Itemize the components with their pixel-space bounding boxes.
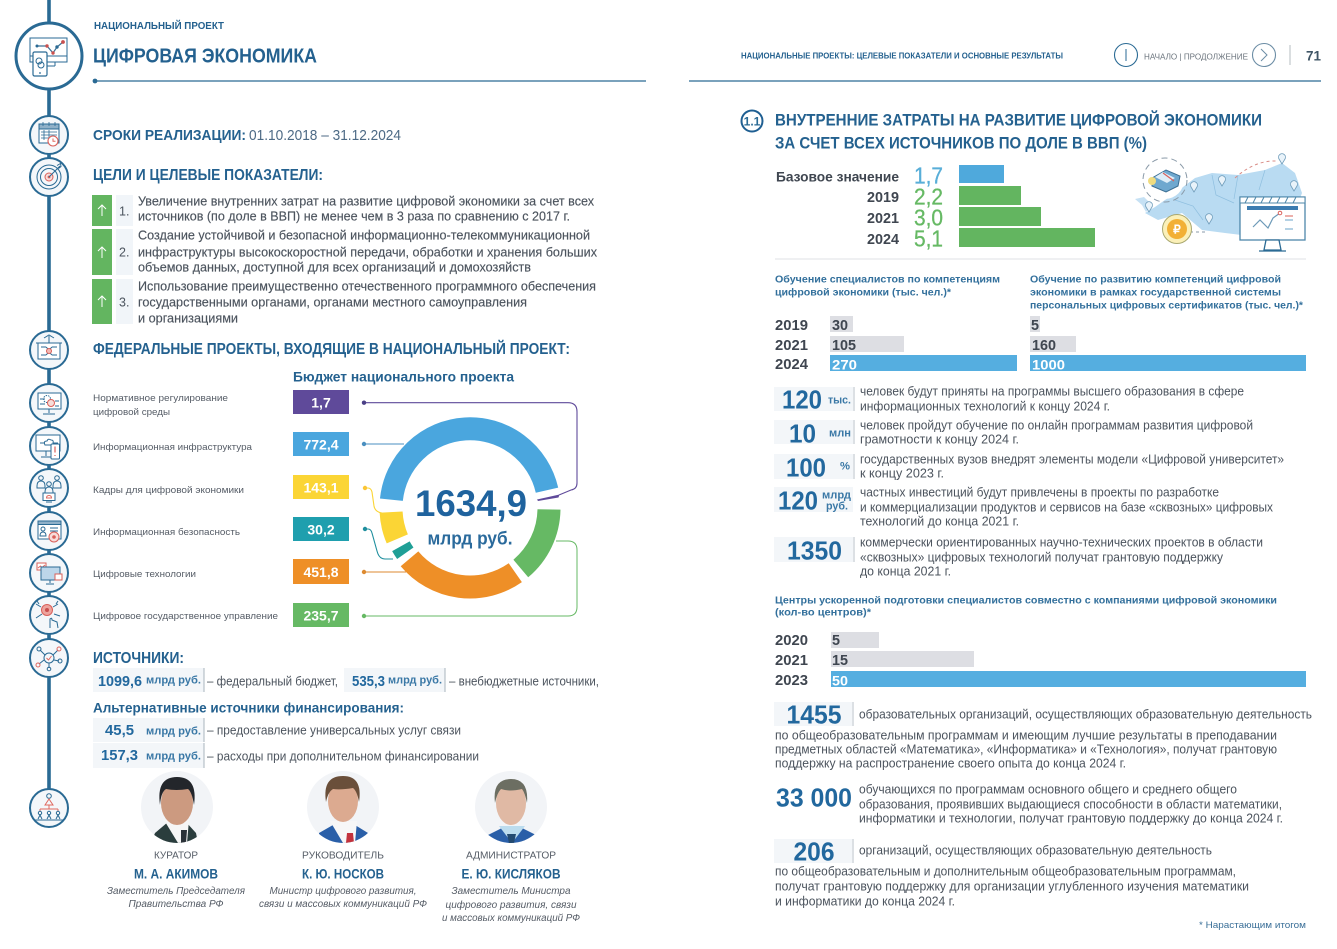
panel: goals list: объемов данных, доступной для всех организаций и домохозяйств bbox=[138, 260, 531, 274]
panel: key figures: человек будут приняты на программы высшего образования в сфере bbox=[860, 384, 1244, 398]
panel: bottom figures: поддержку на распространение своего опыта до конца 2024 г. bbox=[775, 756, 1126, 770]
person: administrator bbox=[442, 850, 580, 924]
panel: key figures: и коммерциализации продуктов и сервисов на базе «сквозных» цифровых bbox=[860, 500, 1274, 514]
panel: key figures: коммерчески ориентированных научно-технических проектов в области bbox=[860, 536, 1263, 550]
panel: goals list: 3. bbox=[119, 296, 129, 310]
bar chart: share of GDP: 2,2 bbox=[914, 184, 943, 210]
panel: key figures: частных инвестиций будут привлечены в проекты по разработке bbox=[860, 486, 1219, 500]
panel: budget value bars: 235,7 bbox=[303, 608, 339, 624]
panel: bottom figures: информатики и технологии, получат грантовую поддержку до конца 2024 г. bbox=[859, 812, 1283, 826]
panel: federal project labels: Цифровые технологии bbox=[93, 569, 196, 580]
panel: bottom figures: по общеобразовательным и дополнительным общеобразовательным программам, bbox=[775, 864, 1236, 878]
person: curator: КУРАТОР bbox=[154, 850, 198, 862]
panel: key figures: грамотности к концу 2024 г. bbox=[860, 432, 1019, 446]
panel: specialists training: 2019 bbox=[775, 317, 808, 334]
panel: bottom figures: 206 bbox=[794, 836, 834, 866]
panel: key figures: к концу 2023 г. bbox=[860, 466, 944, 480]
panel: digital certificates training: 1000 bbox=[1032, 356, 1065, 372]
illustration: map of Russia with monitor and coin bbox=[1135, 154, 1305, 251]
panel: federal project labels bbox=[93, 393, 278, 622]
panel: training centres chart: 50 bbox=[832, 672, 848, 688]
person: head: К. Ю. НОСКОВ bbox=[302, 866, 384, 882]
illustration: map of Russia with monitor and coin: ₽ bbox=[1173, 222, 1181, 236]
panel: specialists training: цифровой экономики (тыс. чел.)* bbox=[775, 286, 952, 298]
panel: goals list: инфраструктуры высокоскоростной передачи, обработки и хранения больших bbox=[138, 246, 598, 260]
person: head: Министр цифрового развития, bbox=[270, 885, 416, 897]
icon: team hierarchy bbox=[30, 789, 68, 827]
panel: sources: млрд руб. bbox=[146, 674, 201, 686]
person: administrator: Заместитель Министра bbox=[452, 886, 571, 897]
panel: sources: Альтернативные источники финансирования: bbox=[93, 700, 404, 716]
panel: federal project labels: Кадры для цифровой экономики bbox=[93, 485, 244, 496]
bar chart: share of GDP bbox=[776, 162, 1095, 252]
person: curator: Правительства РФ bbox=[128, 899, 224, 910]
panel: federal project labels: Цифровое государственное управление bbox=[93, 611, 278, 622]
panel: sources: млрд руб. bbox=[146, 750, 201, 762]
icon: calendar bbox=[30, 116, 68, 154]
panel: sources: ИСТОЧНИКИ: bbox=[93, 650, 184, 667]
donut total value bbox=[415, 483, 527, 548]
panel: sources: – федеральный бюджет, bbox=[207, 674, 338, 688]
panel: sources: – предоставление универсальных услуг связи bbox=[207, 724, 461, 738]
panel: budget value bars: 143,1 bbox=[303, 480, 339, 496]
panel: specialists training: 105 bbox=[832, 337, 856, 354]
panel: sources: 535,3 bbox=[352, 673, 385, 690]
panel: budget value bars: 1,7 bbox=[311, 394, 331, 410]
heading: implementation dates: СРОКИ РЕАЛИЗАЦИИ: bbox=[93, 127, 246, 144]
panel: key figures: млрд bbox=[822, 490, 851, 502]
icon: security card bbox=[30, 512, 68, 550]
panel: key figures: информационных технологий к концу 2024 г. bbox=[860, 400, 1110, 414]
panel: training centres chart: 2020 bbox=[775, 632, 808, 649]
panel: specialists training: 2024 bbox=[775, 356, 809, 373]
panel: training centres chart bbox=[775, 594, 1306, 689]
label: national project: НАЦИОНАЛЬНЫЙ ПРОЕКТ bbox=[94, 19, 224, 32]
panel: key figures: 1350 bbox=[787, 536, 842, 566]
panel: digital certificates training bbox=[1030, 274, 1306, 372]
panel: federal project labels: Нормативное регулирование bbox=[93, 393, 228, 404]
panel: left timeline with icons bbox=[16, 0, 82, 827]
panel: budget value bars: 30,2 bbox=[307, 522, 335, 538]
panel: key figures: 100 bbox=[786, 452, 826, 482]
photo: administrator bbox=[475, 771, 547, 843]
heading: goals: ЦЕЛИ И ЦЕЛЕВЫЕ ПОКАЗАТЕЛИ: bbox=[93, 167, 323, 184]
person: head: связи и массовых коммуникаций РФ bbox=[259, 899, 427, 910]
panel: specialists training: 2021 bbox=[775, 337, 808, 354]
panel: bottom figures: предметных областей «Математика», «Информатика» и «Технология», получат грантовую bbox=[775, 742, 1277, 756]
panel: sources: млрд руб. bbox=[146, 726, 201, 738]
footnote: * Нарастающим итогом bbox=[1199, 920, 1306, 931]
panel: page header left bbox=[93, 19, 646, 83]
panel: goals list: государственными органами, органами местного самоуправления bbox=[138, 296, 527, 310]
icon: presentation board bbox=[30, 331, 68, 369]
panel: key figures: до конца 2021 г. bbox=[860, 564, 951, 578]
bar chart: share of GDP: 2024 bbox=[867, 231, 900, 248]
panel: specialists training: 270 bbox=[832, 356, 857, 372]
icon: target bbox=[30, 158, 68, 196]
panel: key figures: государственных вузов внедрят элементы модели «Цифровой университет» bbox=[860, 452, 1284, 466]
panel: bottom figures: 1455 bbox=[786, 700, 842, 730]
panel: training centres chart: Центры ускоренной подготовки специалистов совместно с компаниями цифровой экономики bbox=[775, 594, 1277, 606]
title: ЦИФРОВАЯ ЭКОНОМИКА bbox=[93, 46, 317, 68]
heading: federal projects: ФЕДЕРАЛЬНЫЕ ПРОЕКТЫ, ВХОДЯЩИЕ В НАЦИОНАЛЬНЫЙ ПРОЕКТ: bbox=[93, 340, 570, 358]
person: administrator: цифрового развития, связи bbox=[446, 899, 577, 911]
panel: key figures: % bbox=[840, 460, 850, 472]
panel: goals list: и организациями bbox=[138, 312, 238, 326]
panel: sources bbox=[93, 650, 599, 768]
panel: training centres chart: (кол-во центров)* bbox=[775, 606, 872, 618]
heading: implementation dates: 01.10.2018 – 31.12.2024 bbox=[249, 127, 401, 144]
person: curator: Заместитель Председателя bbox=[107, 886, 246, 897]
panel: key figures: технологий до конца 2021 г. bbox=[860, 514, 1019, 528]
panel: goals list: 1. bbox=[119, 204, 129, 218]
panel: training centres chart: 2021 bbox=[775, 652, 808, 669]
donut chart bbox=[362, 400, 577, 618]
bar chart: share of GDP: 2019 bbox=[867, 189, 899, 206]
panel: key figures: 10 bbox=[789, 418, 816, 448]
panel: sources: – расходы при дополнительном финансировании bbox=[207, 750, 479, 764]
panel: training centres chart: 5 bbox=[832, 632, 840, 649]
donut total value: млрд руб. bbox=[428, 528, 512, 548]
panel: budget value bars: 451,8 bbox=[303, 564, 339, 580]
panel: key figures: 120 bbox=[778, 486, 818, 516]
panel: training centres chart: 15 bbox=[832, 652, 848, 669]
icon: people bbox=[30, 469, 68, 507]
panel: key figures: 120 bbox=[782, 384, 822, 414]
panel: key figures: млн bbox=[829, 428, 851, 440]
panel: goals list: Использование преимущественно отечественного программного обеспечения bbox=[138, 280, 596, 294]
person: administrator: АДМИНИСТРАТОР bbox=[466, 850, 556, 862]
person: head bbox=[259, 850, 427, 910]
panel: budget value bars bbox=[293, 390, 349, 627]
panel: bottom figures: обучающихся по программам основного общего и среднего общего bbox=[859, 782, 1237, 796]
panel: digital certificates training: персональных цифровых сертификатов (тыс. чел.)* bbox=[1030, 300, 1304, 312]
heading: budget: Бюджет национального проекта bbox=[293, 368, 514, 384]
panel: goals list: Создание устойчивой и безопасной информационно-телекоммуникационной bbox=[138, 228, 590, 242]
icon: sources network bbox=[30, 639, 68, 677]
panel: federal project labels: Информационная инфраструктура bbox=[93, 442, 253, 453]
panel: federal project labels: цифровой среды bbox=[93, 407, 170, 418]
person: administrator: и массовых коммуникаций РФ bbox=[442, 913, 580, 924]
bar chart: share of GDP: 1,7 bbox=[914, 162, 943, 188]
person: curator bbox=[107, 850, 246, 910]
panel: digital certificates training: 5 bbox=[1031, 317, 1039, 334]
panel: key figures: человек пройдут обучение по онлайн программам развития цифровой bbox=[860, 418, 1253, 432]
panel: specialists training: Обучение специалистов по компетенциям bbox=[775, 274, 1000, 286]
panel: specialists training: 30 bbox=[832, 317, 848, 334]
icon: infrastructure cloud bbox=[30, 427, 68, 465]
panel: key figures: руб. bbox=[826, 500, 848, 512]
panel: bottom figures: организаций, осуществляющих образовательную деятельность bbox=[859, 844, 1212, 858]
person: curator: М. А. АКИМОВ bbox=[134, 866, 218, 882]
photo: head of project bbox=[307, 771, 379, 843]
panel: sources: 157,3 bbox=[101, 747, 138, 764]
panel: goals list bbox=[92, 194, 598, 326]
panel: bottom figures: образовательных организаций, осуществляющих образовательную деятельность bbox=[859, 708, 1312, 722]
panel: bottom figures bbox=[774, 700, 1312, 908]
panel: sources: млрд руб. bbox=[388, 674, 442, 686]
icon: government hand bbox=[30, 596, 68, 634]
panel: key figures: тыс. bbox=[828, 394, 851, 406]
panel: budget value bars: 772,4 bbox=[303, 436, 339, 452]
panel: bottom figures: получат грантовую поддержку для организации углубленного изучения математики bbox=[775, 880, 1249, 894]
heading: section 1.1: 1.1 bbox=[744, 114, 761, 128]
panel: digital certificates training: Обучение по развитию компетенций цифровой bbox=[1030, 274, 1281, 286]
panel: bottom figures: и информатики до конца 2024 г. bbox=[775, 894, 955, 908]
bar chart: share of GDP: 3,0 bbox=[914, 204, 943, 230]
heading: section 1.1: ВНУТРЕННИЕ ЗАТРАТЫ НА РАЗВИТИЕ ЦИФРОВОЙ ЭКОНОМИКИ bbox=[775, 110, 1262, 130]
panel: bottom figures: образования, проявивших выдающиеся способности в области математики, bbox=[859, 798, 1282, 812]
panel: page header right: НАЦИОНАЛЬНЫЕ ПРОЕКТЫ: ЦЕЛЕВЫЕ ПОКАЗАТЕЛИ И ОСНОВНЫЕ РЕЗУЛЬТАТЫ bbox=[741, 50, 1063, 60]
panel: goals list: источников (по доле в ВВП) не менее чем в 3 раза по сравнению с 2017 г. bbox=[138, 210, 570, 224]
heading: section 1.1 bbox=[742, 110, 1262, 152]
panel: page header right: НАЧАЛО | ПРОДОЛЖЕНИЕ bbox=[1144, 52, 1248, 62]
bar chart: share of GDP: 5,1 bbox=[914, 226, 943, 252]
panel: sources: 1099,6 bbox=[98, 673, 142, 690]
person: administrator: Е. Ю. КИСЛЯКОВ bbox=[462, 866, 560, 882]
icon: technologies screens bbox=[30, 554, 68, 592]
photo: curator bbox=[141, 771, 213, 843]
icon: regulation monitor bbox=[30, 384, 68, 422]
icon: digital devices bbox=[16, 23, 82, 89]
panel: goals list: Увеличение внутренних затрат на развитие цифровой экономики за счет всех bbox=[138, 194, 595, 208]
panel: key figures bbox=[774, 384, 1284, 578]
bar chart: share of GDP: Базовое значение bbox=[776, 168, 899, 184]
panel: people bbox=[107, 771, 580, 924]
panel: sources: – внебюджетные источники, bbox=[449, 674, 599, 688]
panel: federal project labels: Информационная безопасность bbox=[93, 527, 240, 538]
panel: page header right: 71 bbox=[1306, 48, 1321, 64]
panel: page header right bbox=[689, 44, 1321, 81]
panel: specialists training bbox=[775, 274, 1017, 373]
panel: digital certificates training: экономики в рамках государственной системы bbox=[1030, 286, 1281, 298]
donut total value: 1634,9 bbox=[415, 483, 527, 524]
panel: training centres chart: 2023 bbox=[775, 672, 808, 689]
bar chart: share of GDP: 2021 bbox=[867, 210, 899, 227]
panel: key figures: «сквозных» цифровых технологий получат грантовую поддержку bbox=[860, 550, 1224, 564]
person: head: РУКОВОДИТЕЛЬ bbox=[302, 850, 384, 862]
panel: bottom figures: по общеобразовательным программам и имеющим лучшие результаты в преподавании bbox=[775, 728, 1277, 742]
panel: sources: 45,5 bbox=[105, 722, 134, 739]
panel: bottom figures: 33 000 bbox=[776, 782, 852, 812]
heading: implementation dates bbox=[93, 127, 401, 144]
panel: digital certificates training: 160 bbox=[1032, 337, 1056, 354]
heading: section 1.1: ЗА СЧЕТ ВСЕХ ИСТОЧНИКОВ ПО ДОЛЕ В ВВП (%) bbox=[775, 134, 1147, 152]
panel: goals list: 2. bbox=[119, 246, 129, 260]
